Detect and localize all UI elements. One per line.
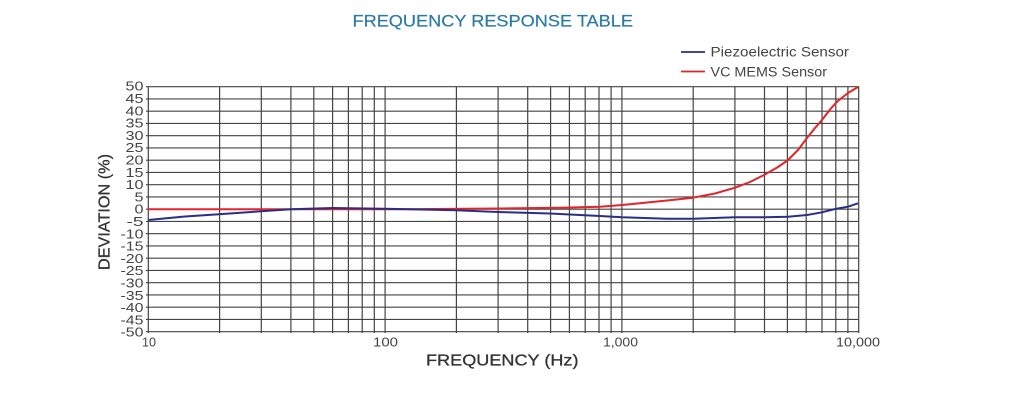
y axis labels: -50 (120, 325, 144, 340)
y axis labels: -5 (126, 214, 144, 229)
x axis title: FREQUENCY (Hz) (426, 353, 578, 370)
y axis labels (120, 79, 144, 340)
y axis labels: -20 (120, 251, 144, 266)
y axis labels: 5 (134, 189, 144, 204)
y axis labels: 50 (126, 79, 144, 94)
y axis labels: -25 (120, 263, 144, 278)
y axis labels: 25 (126, 140, 144, 155)
legend: piezoelectric sensor: Piezoelectric Sensor (710, 45, 850, 60)
curve: VC MEMS sensor (148, 87, 858, 209)
legend (681, 45, 850, 80)
curve: piezoelectric sensor (148, 203, 858, 220)
y axis labels: -30 (120, 276, 144, 290)
y axis labels: 45 (126, 91, 144, 106)
y axis labels: 20 (126, 152, 144, 168)
title: FREQUENCY RESPONSE TABLE (352, 12, 633, 31)
x axis labels: 1,000 (603, 335, 638, 350)
legend: VC MEMS sensor: VC MEMS Sensor (710, 65, 828, 80)
y axis title: DEVIATION (%) (96, 154, 114, 270)
y axis labels: -40 (120, 300, 144, 315)
y axis labels: 30 (126, 128, 144, 143)
y axis labels: 0 (134, 202, 144, 217)
y axis labels: 35 (126, 116, 144, 131)
y axis labels: -10 (120, 226, 144, 241)
x axis labels (142, 335, 880, 350)
chart grid (146, 87, 859, 333)
y axis labels: -45 (120, 312, 144, 327)
y axis labels: 10 (126, 177, 144, 192)
y axis labels: -35 (120, 288, 144, 303)
x axis labels: 100 (373, 335, 398, 350)
x axis labels: 10 (142, 335, 156, 350)
y axis labels: -15 (120, 239, 144, 254)
y axis labels: 40 (126, 103, 144, 118)
x axis labels: 10,000 (836, 335, 880, 350)
y axis labels: 15 (126, 165, 144, 180)
